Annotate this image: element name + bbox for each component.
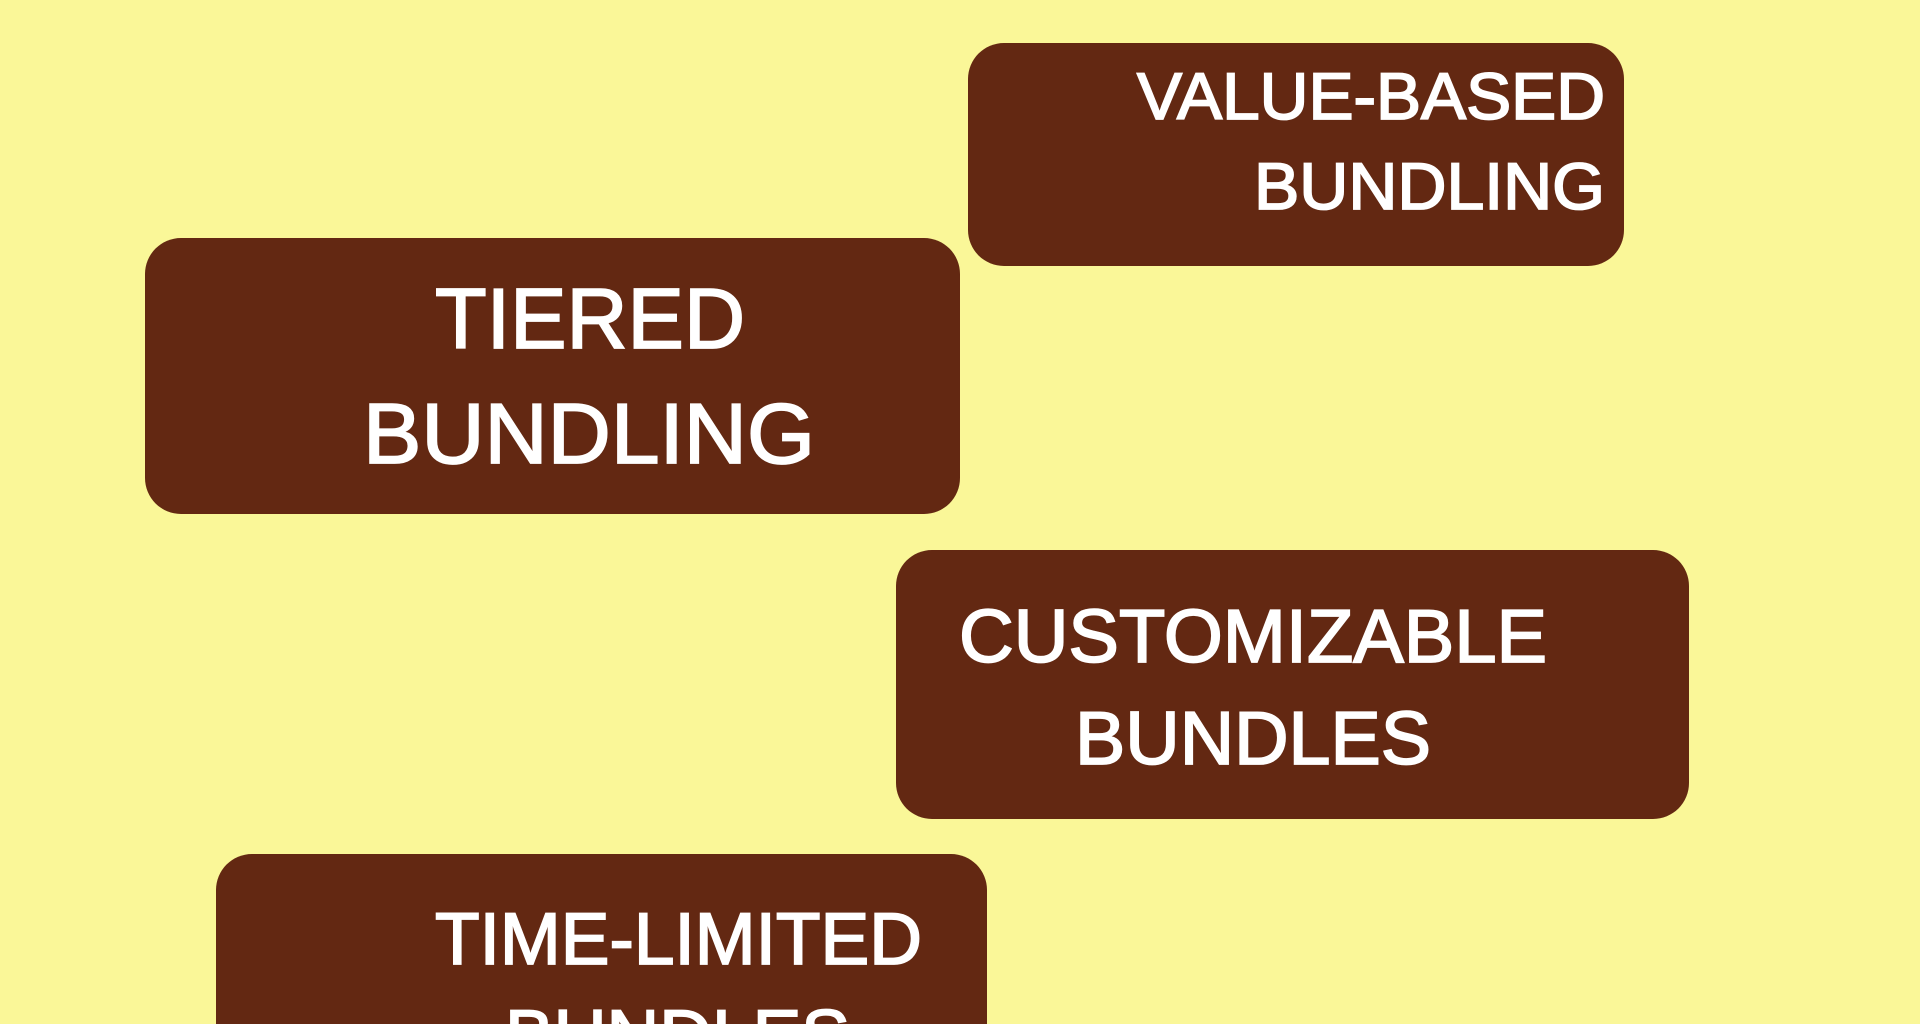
label: value-based: VALUE-BASED xyxy=(1137,59,1605,133)
panel: value-based bundling xyxy=(968,43,1624,266)
label: time-limited: TIME-LIMITED xyxy=(435,899,922,980)
label: tiered: TIERED xyxy=(435,272,745,367)
label: bundling: BUNDLING xyxy=(363,387,815,482)
panel: tiered bundling xyxy=(145,238,960,514)
label: customizable: CUSTOMIZABLE xyxy=(959,594,1547,678)
panel: time-limited bundles xyxy=(216,854,987,1024)
panel: customizable bundles xyxy=(896,550,1689,819)
label: bundling: BUNDLING xyxy=(1254,149,1605,223)
label: bundles: BUNDLES xyxy=(1075,696,1431,780)
